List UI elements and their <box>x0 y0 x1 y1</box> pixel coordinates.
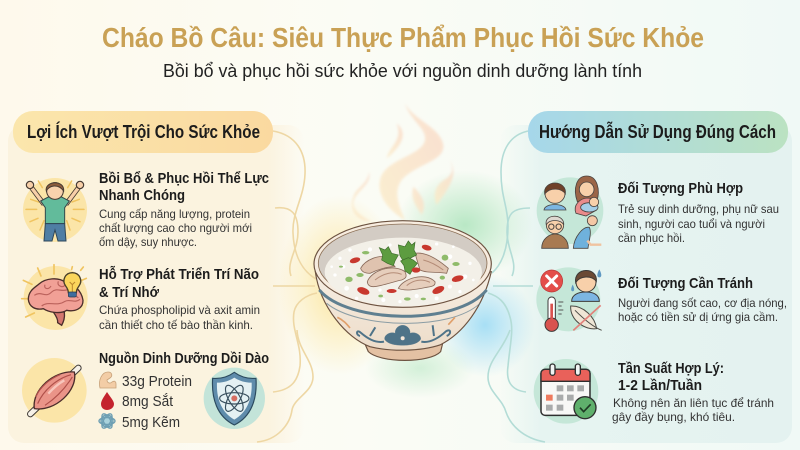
steam <box>352 103 453 222</box>
pigeon meat slices <box>361 253 448 290</box>
text: recovery: chất lượng cao cho người mới <box>99 221 252 235</box>
orange decoration <box>337 317 455 328</box>
text: recovery <box>99 170 269 249</box>
thermometer <box>548 297 555 323</box>
text: recovery: Bồi Bổ & Phục Hồi Thể Lực <box>99 170 269 187</box>
grandfather glasses <box>549 224 561 229</box>
text: frequency <box>612 360 774 424</box>
text: nutrition <box>99 350 269 431</box>
teal connector curves <box>488 131 545 442</box>
mother and baby <box>575 176 598 202</box>
text: brain development <box>99 266 260 332</box>
text: brain development: Chứa phospholipid và axit amin <box>99 303 260 317</box>
text: frequency: gây đầy bụng, khó tiêu. <box>612 410 735 424</box>
text: recovery: Cung cấp năng lượng, protein <box>99 207 250 221</box>
icon: brain and light bulb <box>22 265 88 330</box>
heading pill: benefits <box>13 111 273 153</box>
text: suitable people <box>618 180 779 245</box>
grandfather <box>542 234 568 248</box>
text: brain development: & Trí Nhớ <box>99 284 159 301</box>
panel: right guidance background <box>500 125 792 443</box>
text: suitable people: cần phục hồi. <box>618 231 685 245</box>
heading pill: benefits: Lợi Ích Vượt Trội Cho Sức Khỏe <box>27 121 260 142</box>
porridge <box>325 238 482 306</box>
title: Cháo Bồ Câu: Siêu Thực Phẩm Phục Hồi Sức Khỏe <box>102 22 704 53</box>
text: people to avoid: Đối Tượng Cần Tránh <box>618 275 753 292</box>
text: suitable people: Đối Tượng Phù Hợp <box>618 180 743 197</box>
central colored glow <box>278 170 535 398</box>
text: nutrition: 8mg Sắt <box>122 393 173 410</box>
text: brain development: Hỗ Trợ Phát Triển Trí Não <box>99 266 259 283</box>
bowl body <box>315 272 491 350</box>
icon: energetic person <box>23 178 87 242</box>
text: people to avoid <box>618 275 787 324</box>
heading pill: guidance <box>528 111 788 153</box>
text: nutrition: Nguồn Dinh Dưỡng Dồi Dào <box>99 350 269 367</box>
floral motif <box>357 325 450 345</box>
bowl rim <box>314 221 491 307</box>
bowl foot <box>364 341 443 360</box>
text: suitable people: sinh, người cao tuổi và người <box>618 217 765 231</box>
blue bands <box>319 290 487 323</box>
icon: atom shield <box>204 368 265 429</box>
red x <box>541 270 563 292</box>
goji berries <box>349 244 464 296</box>
text: people to avoid: Người đang sốt cao, cơ địa nóng, <box>618 296 787 310</box>
subtitle: Bồi bổ và phục hồi sức khỏe với nguồn dinh dưỡng lành tính <box>163 61 642 81</box>
icon: zinc atom <box>99 412 115 430</box>
green onion <box>339 251 460 301</box>
text: recovery: ốm dậy, suy nhược. <box>99 235 197 249</box>
gold connector curves <box>257 131 317 442</box>
text: nutrition: 5mg Kẽm <box>122 415 180 431</box>
child <box>544 204 566 210</box>
rice grains <box>330 242 475 303</box>
icon: suitable people group <box>537 176 603 248</box>
text: frequency: Tần Suất Hợp Lý: <box>618 360 724 377</box>
crossed feather <box>571 306 597 329</box>
text: suitable people: Trẻ suy dinh dưỡng, phụ nữ sau <box>618 202 779 216</box>
recovering adult <box>573 227 590 248</box>
text: recovery: Nhanh Chóng <box>99 187 185 204</box>
parsley garnish <box>379 241 417 274</box>
icon: blood drop <box>101 392 114 410</box>
icon: calendar <box>534 359 598 424</box>
text: brain development: cần thiết cho tế bào thần kinh. <box>99 318 253 332</box>
icon: muscle <box>22 358 87 423</box>
sick person <box>572 292 599 301</box>
text: frequency: 1-2 Lần/Tuần <box>618 377 702 394</box>
panel: left benefits background <box>8 125 304 443</box>
text: frequency: Không nên ăn liên tục để tránh <box>613 396 774 410</box>
icon: flexed arm <box>99 372 116 388</box>
icon: people to avoid <box>536 267 602 331</box>
bowl of pigeon porridge <box>314 221 491 360</box>
text: people to avoid: hoặc có tiền sử dị ứng gia cầm. <box>618 310 778 324</box>
text: nutrition: 33g Protein <box>122 374 192 390</box>
